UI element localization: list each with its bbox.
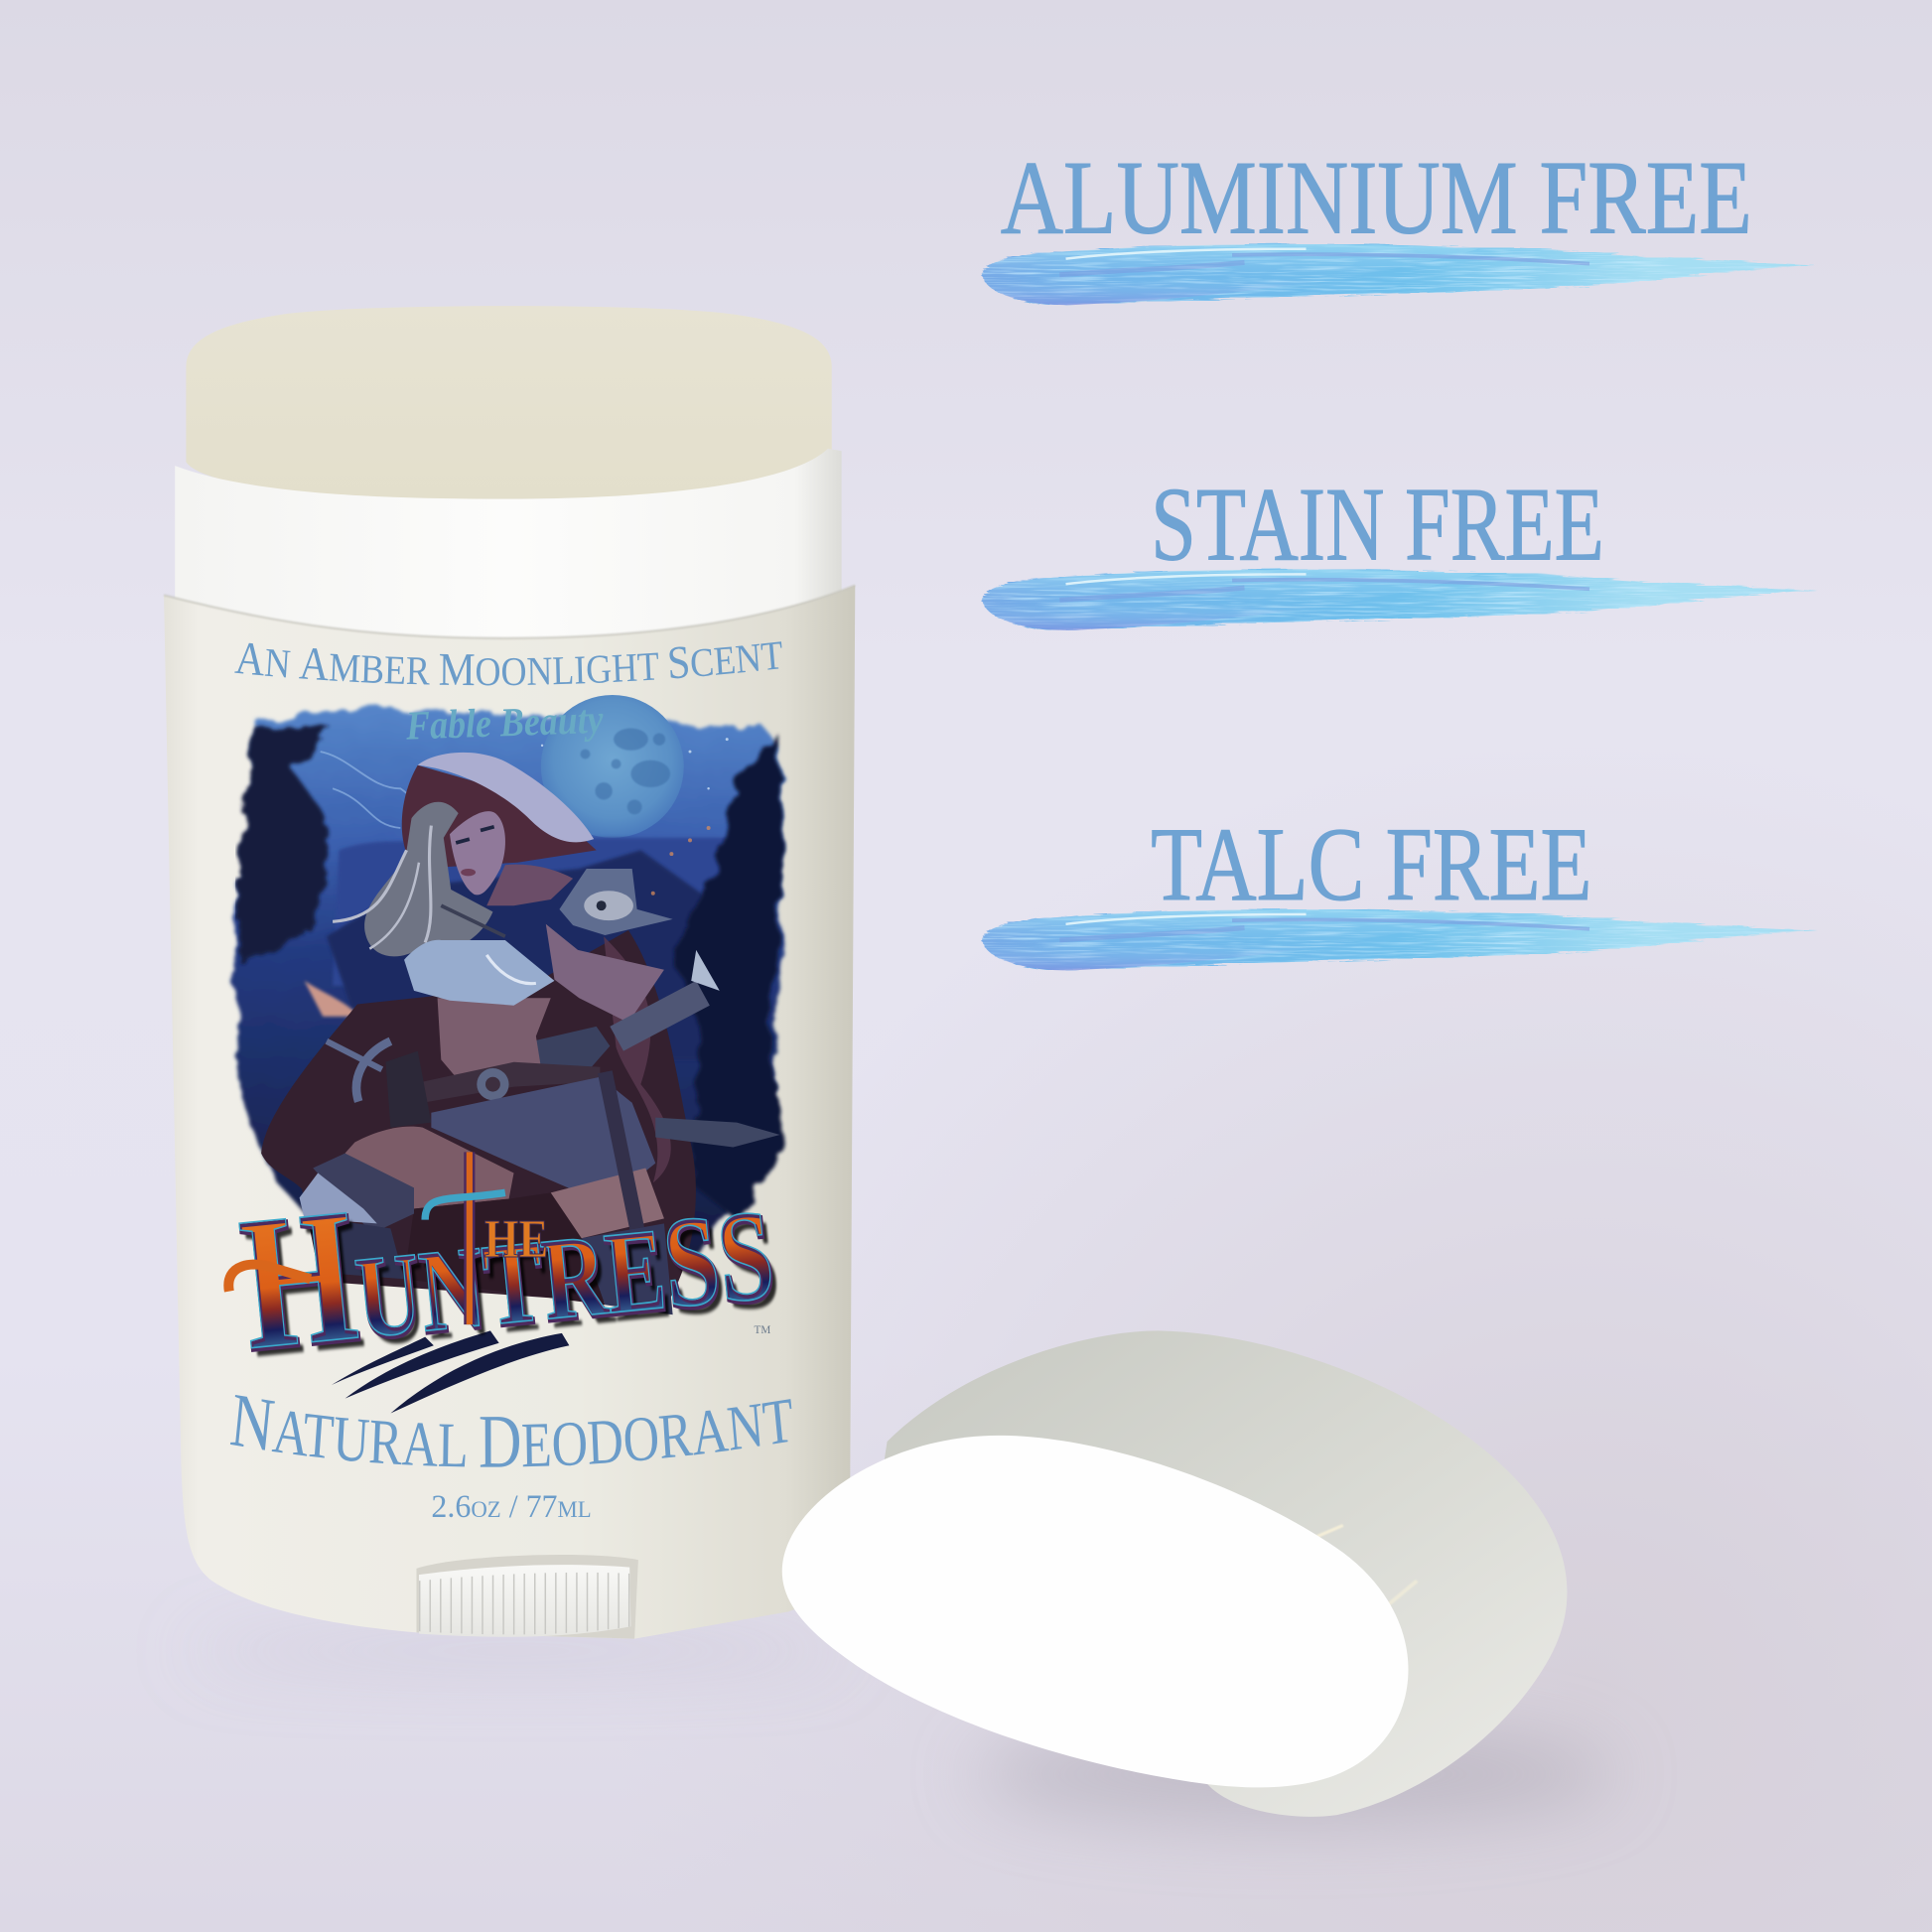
brush stroke 2: [982, 570, 1818, 630]
ground shadow: [185, 1636, 1614, 1824]
hair: [364, 802, 492, 956]
product top: [186, 306, 832, 499]
clouds and hills: [305, 752, 727, 1059]
cap highlights: [1309, 1525, 1417, 1616]
stars: [541, 738, 729, 790]
skirt: [431, 1077, 655, 1204]
product title: the huntress: [228, 1127, 786, 1414]
wheel: [419, 1565, 630, 1637]
bracer and glove: [532, 950, 720, 1077]
title word: HUNTRESS: [232, 1127, 780, 1389]
label text: size: 2.6oz / 77ml: [431, 1488, 592, 1524]
label text: scent: AN AMBER MOONLIGHT SCENT: [234, 641, 782, 685]
trees right: [674, 735, 782, 1220]
heading: aluminium free: ALUMINIUM FREE: [1001, 140, 1752, 256]
hood: [402, 753, 597, 869]
arm: [546, 924, 664, 1023]
swash on H: [228, 1265, 311, 1292]
cape: [261, 930, 696, 1307]
right thigh: [551, 1169, 664, 1238]
removed cap: [782, 1330, 1567, 1817]
sword: [327, 1041, 390, 1102]
brush stroke 1: [982, 244, 1818, 305]
claw marks: [332, 1330, 569, 1414]
body: [164, 586, 855, 1639]
boots: [300, 1154, 673, 1314]
sword T and HE: [425, 1152, 548, 1324]
moon: [541, 695, 684, 838]
wheel notch: [416, 1555, 638, 1639]
heading: stain free: STAIN FREE: [1151, 466, 1604, 582]
title word: HUNTRESS: [233, 1129, 781, 1392]
sword T and HE: HE: [484, 1208, 548, 1269]
cap outer shell: [863, 1330, 1567, 1817]
pouch: [385, 1051, 431, 1128]
title shadow: HUNTRESS: [238, 1136, 786, 1398]
label illustration: [234, 695, 782, 1314]
face: [450, 811, 505, 895]
heading: talc free: TALC FREE: [1151, 806, 1591, 922]
inner white sleeve: [175, 449, 842, 665]
shoulder armour with skull: [559, 869, 673, 935]
label text: natural deodorant: NATURAL DEODORANT: [230, 1395, 792, 1467]
night sky: [234, 707, 781, 1257]
left thigh: [345, 1127, 514, 1208]
brush stroke 3: [982, 909, 1818, 970]
deodorant stick: [163, 306, 896, 1666]
moon craters: [581, 728, 670, 814]
cap white face: [782, 1436, 1408, 1787]
torso: [438, 998, 551, 1092]
trees left: [240, 727, 332, 964]
dagger and spear: [605, 1072, 780, 1228]
belt and buckle: [423, 1062, 600, 1103]
armoured top: [404, 940, 554, 1006]
brand script: Fable Beauty: [404, 697, 605, 749]
trademark: TM: [755, 1324, 770, 1336]
scarf: [486, 865, 573, 905]
dark cape under legs: [404, 1192, 605, 1305]
